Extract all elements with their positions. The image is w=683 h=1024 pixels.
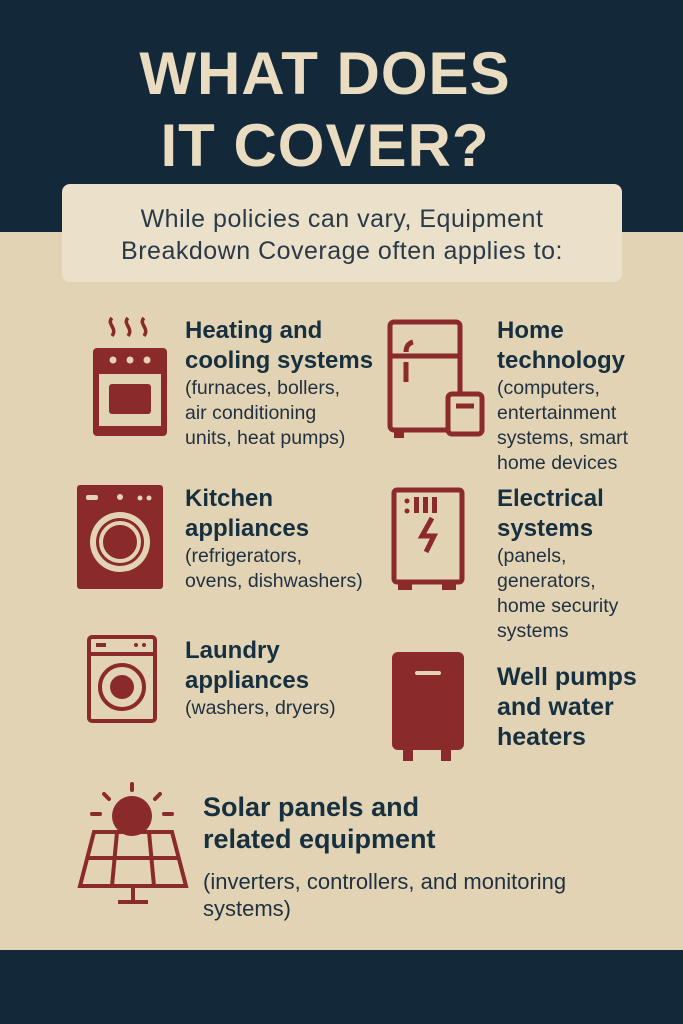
- icon: water heater: [392, 652, 464, 761]
- callout: [62, 184, 622, 282]
- text: solar: systems): [203, 896, 291, 921]
- text: heating: cooling systems: [185, 347, 373, 374]
- title: IT COVER?: [160, 112, 490, 179]
- text: solar: (inverters, controllers, and monitoring: [203, 869, 566, 894]
- icon: fridge: [388, 320, 484, 438]
- callout: While policies can vary, Equipment: [141, 205, 543, 233]
- text: well pumps: heaters: [497, 723, 586, 751]
- text: laundry: Laundry: [185, 637, 280, 664]
- text: home tech: systems, smart: [497, 427, 628, 449]
- text: solar: [203, 792, 566, 921]
- callout: Breakdown Coverage often applies to:: [121, 237, 563, 265]
- text: electrical: (panels,: [497, 545, 566, 567]
- text: heating: [185, 317, 373, 449]
- text: kitchen: ovens, dishwashers): [185, 570, 363, 592]
- icon: heating stove: [93, 316, 167, 436]
- text: electrical: systems: [497, 515, 593, 542]
- text: well pumps: [497, 663, 637, 751]
- bottom band: [0, 950, 683, 1024]
- text: electrical: home security: [497, 595, 618, 617]
- text: kitchen: (refrigerators,: [185, 545, 302, 567]
- text: kitchen: [185, 485, 363, 592]
- text: heating: Heating and: [185, 317, 322, 344]
- text: electrical: [497, 485, 618, 642]
- text: home tech: technology: [497, 347, 625, 374]
- text: home tech: [497, 317, 628, 474]
- icon: electrical panel: [392, 488, 464, 590]
- text: heating: air conditioning: [185, 402, 316, 424]
- text: electrical: generators,: [497, 570, 596, 592]
- top band: [0, 0, 683, 232]
- text: home tech: (computers,: [497, 377, 600, 399]
- icon: laundry: [87, 635, 157, 723]
- text: laundry: (washers, dryers): [185, 697, 336, 719]
- text: home tech: Home: [497, 317, 564, 344]
- text: home tech: home devices: [497, 452, 617, 474]
- icon: solar panel: [78, 782, 188, 904]
- text: laundry: appliances: [185, 667, 309, 694]
- text: kitchen: Kitchen: [185, 485, 273, 512]
- icon: kitchen washer: [77, 485, 163, 589]
- text: electrical: systems: [497, 620, 569, 642]
- text: heating: units, heat pumps): [185, 427, 345, 449]
- title: [139, 40, 511, 179]
- text: home tech: entertainment: [497, 402, 616, 424]
- text: heating: (furnaces, bollers,: [185, 377, 340, 399]
- text: kitchen: appliances: [185, 515, 309, 542]
- text: electrical: Electrical: [497, 485, 604, 512]
- text: laundry: [185, 637, 336, 719]
- text: solar: Solar panels and: [203, 792, 419, 822]
- title: WHAT DOES: [139, 40, 511, 107]
- text: solar: related equipment: [203, 824, 436, 854]
- text: well pumps: Well pumps: [497, 663, 637, 691]
- text: well pumps: and water: [497, 693, 614, 721]
